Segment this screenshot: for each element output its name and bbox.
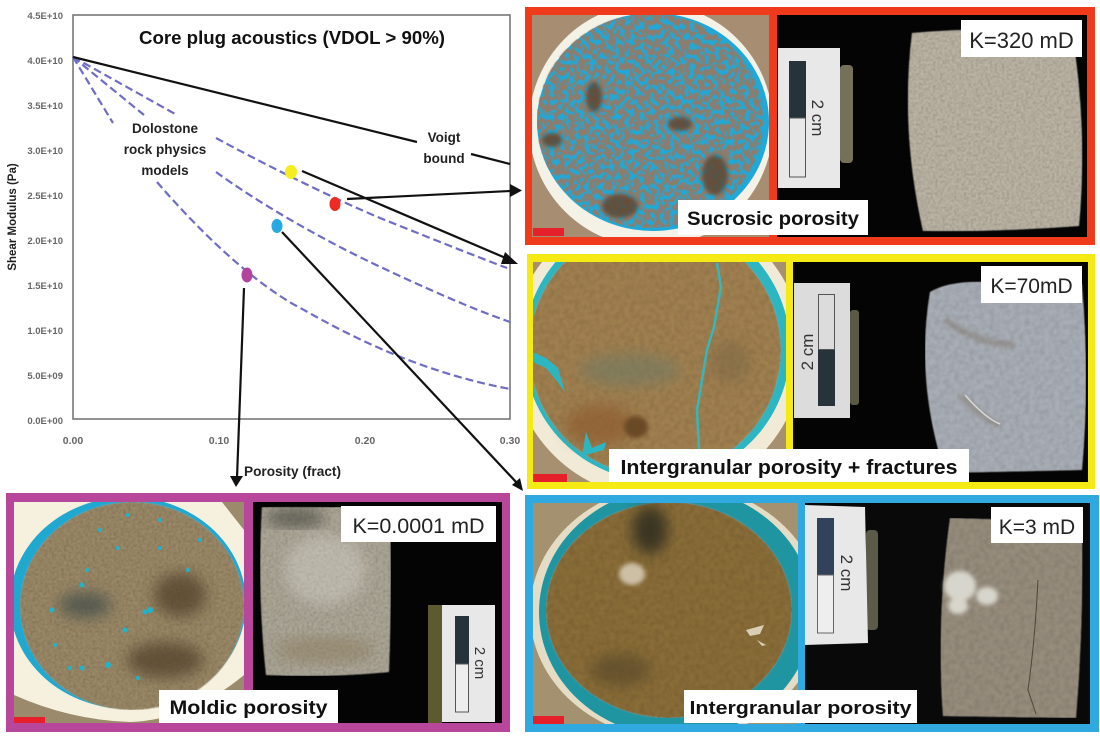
y axis tick labels: 2.5E+10	[27, 191, 63, 202]
chart title: Core plug acoustics (VDOL > 90%)	[139, 28, 445, 48]
scale card	[778, 48, 840, 188]
label: K=0.0001 mD	[341, 506, 496, 542]
y axis tick labels: 4.5E+10	[27, 11, 63, 22]
label: intergranular porosity: Intergranular porosity	[690, 697, 912, 718]
label: dolostone rock physics models: models	[141, 163, 189, 178]
x axis tick labels: 0.20	[355, 435, 375, 447]
chart: shear modulus vs porosity	[7, 11, 520, 479]
thin section photo	[10, 497, 246, 723]
panel: intergranular porosity	[525, 484, 1099, 740]
panel: moldic porosity	[6, 493, 510, 732]
data point: intergranular (blue)	[272, 219, 282, 233]
y axis tick labels: 3.0E+10	[27, 146, 63, 157]
scale card: 2 cm	[837, 555, 856, 591]
scale card: 2 cm	[798, 334, 817, 370]
label: dolostone rock physics models	[124, 121, 206, 178]
label: dolostone rock physics models: Dolostone	[132, 121, 198, 136]
label: moldic porosity: Moldic porosity	[170, 697, 328, 719]
scale card: 2 cm	[808, 100, 827, 136]
core plug photo	[777, 15, 1087, 237]
label: intergranular porosity	[684, 690, 917, 723]
data point: moldic (purple)	[242, 268, 252, 282]
arrow: purple point to moldic panel	[230, 288, 244, 487]
y axis tick labels: 5.0E+09	[27, 371, 63, 382]
y axis tick labels: 4.0E+10	[27, 56, 63, 67]
panel: sucrosic porosity	[525, 3, 1095, 247]
label: moldic porosity	[159, 690, 338, 723]
y axis tick labels: 1.5E+10	[27, 281, 63, 292]
scale card	[442, 605, 495, 722]
x axis tick labels: 0.10	[209, 435, 229, 447]
x axis tick labels: 0.00	[63, 435, 83, 447]
arrow: red point to sucrosic panel	[347, 184, 522, 199]
Voigt bound line	[73, 57, 510, 164]
label: K=70mD	[981, 266, 1082, 303]
core plug photo	[805, 503, 1090, 724]
arrow: blue point to intergranular panel	[282, 232, 523, 491]
label: sucrosic porosity	[678, 200, 868, 235]
y axis tick labels: 3.5E+10	[27, 101, 63, 112]
x axis tick labels	[63, 435, 520, 447]
label: K=3 mD	[991, 507, 1083, 543]
scale card	[794, 283, 850, 418]
label: Voigt bound: bound	[423, 151, 465, 166]
label: sucrosic porosity: Sucrosic porosity	[687, 209, 859, 230]
y axis tick labels: 1.0E+10	[27, 326, 63, 337]
y axis title: Shear Modulus (Pa)	[7, 163, 19, 271]
x axis tick labels: 0.30	[500, 435, 520, 447]
panel: intergranular porosity + fractures	[527, 254, 1095, 489]
thin section photo	[532, 15, 769, 237]
panel frame	[6, 493, 510, 732]
x axis title: Porosity (fract)	[244, 464, 341, 479]
fracture	[697, 263, 721, 450]
label: K=320 mD	[961, 20, 1082, 57]
core plug photo	[253, 502, 502, 723]
label: K=3 mD: K=3 mD	[999, 516, 1075, 539]
thin section photo	[533, 262, 786, 482]
label: Voigt bound	[423, 130, 465, 166]
label: Voigt bound: Voigt	[428, 130, 461, 145]
label: K=0.0001 mD: K=0.0001 mD	[352, 514, 485, 538]
data point: sucrosic (red)	[330, 197, 340, 211]
label: intergranular porosity + fractures	[609, 449, 969, 482]
label: K=320 mD: K=320 mD	[969, 28, 1074, 53]
dolostone rock physics model curves	[73, 57, 510, 389]
core plug photo	[793, 262, 1088, 482]
y axis tick labels: 0.0E+00	[27, 416, 63, 427]
y axis tick labels	[27, 11, 63, 427]
plot area frame	[73, 15, 510, 419]
y axis tick labels: 2.0E+10	[27, 236, 63, 247]
panel frame	[527, 254, 1095, 489]
scale card: 2 cm	[471, 647, 488, 679]
scale card	[805, 505, 868, 645]
label: dolostone rock physics models: rock physics	[124, 142, 206, 157]
panel frame	[525, 495, 1099, 732]
label: K=70mD: K=70mD	[990, 275, 1073, 298]
label: intergranular porosity + fractures: Intergranular porosity + fractures	[620, 457, 958, 479]
data point: fractured (yellow)	[285, 165, 297, 179]
arrow: yellow point to fractured panel	[302, 171, 518, 264]
panel frame	[525, 7, 1095, 245]
thin section photo	[533, 503, 798, 724]
